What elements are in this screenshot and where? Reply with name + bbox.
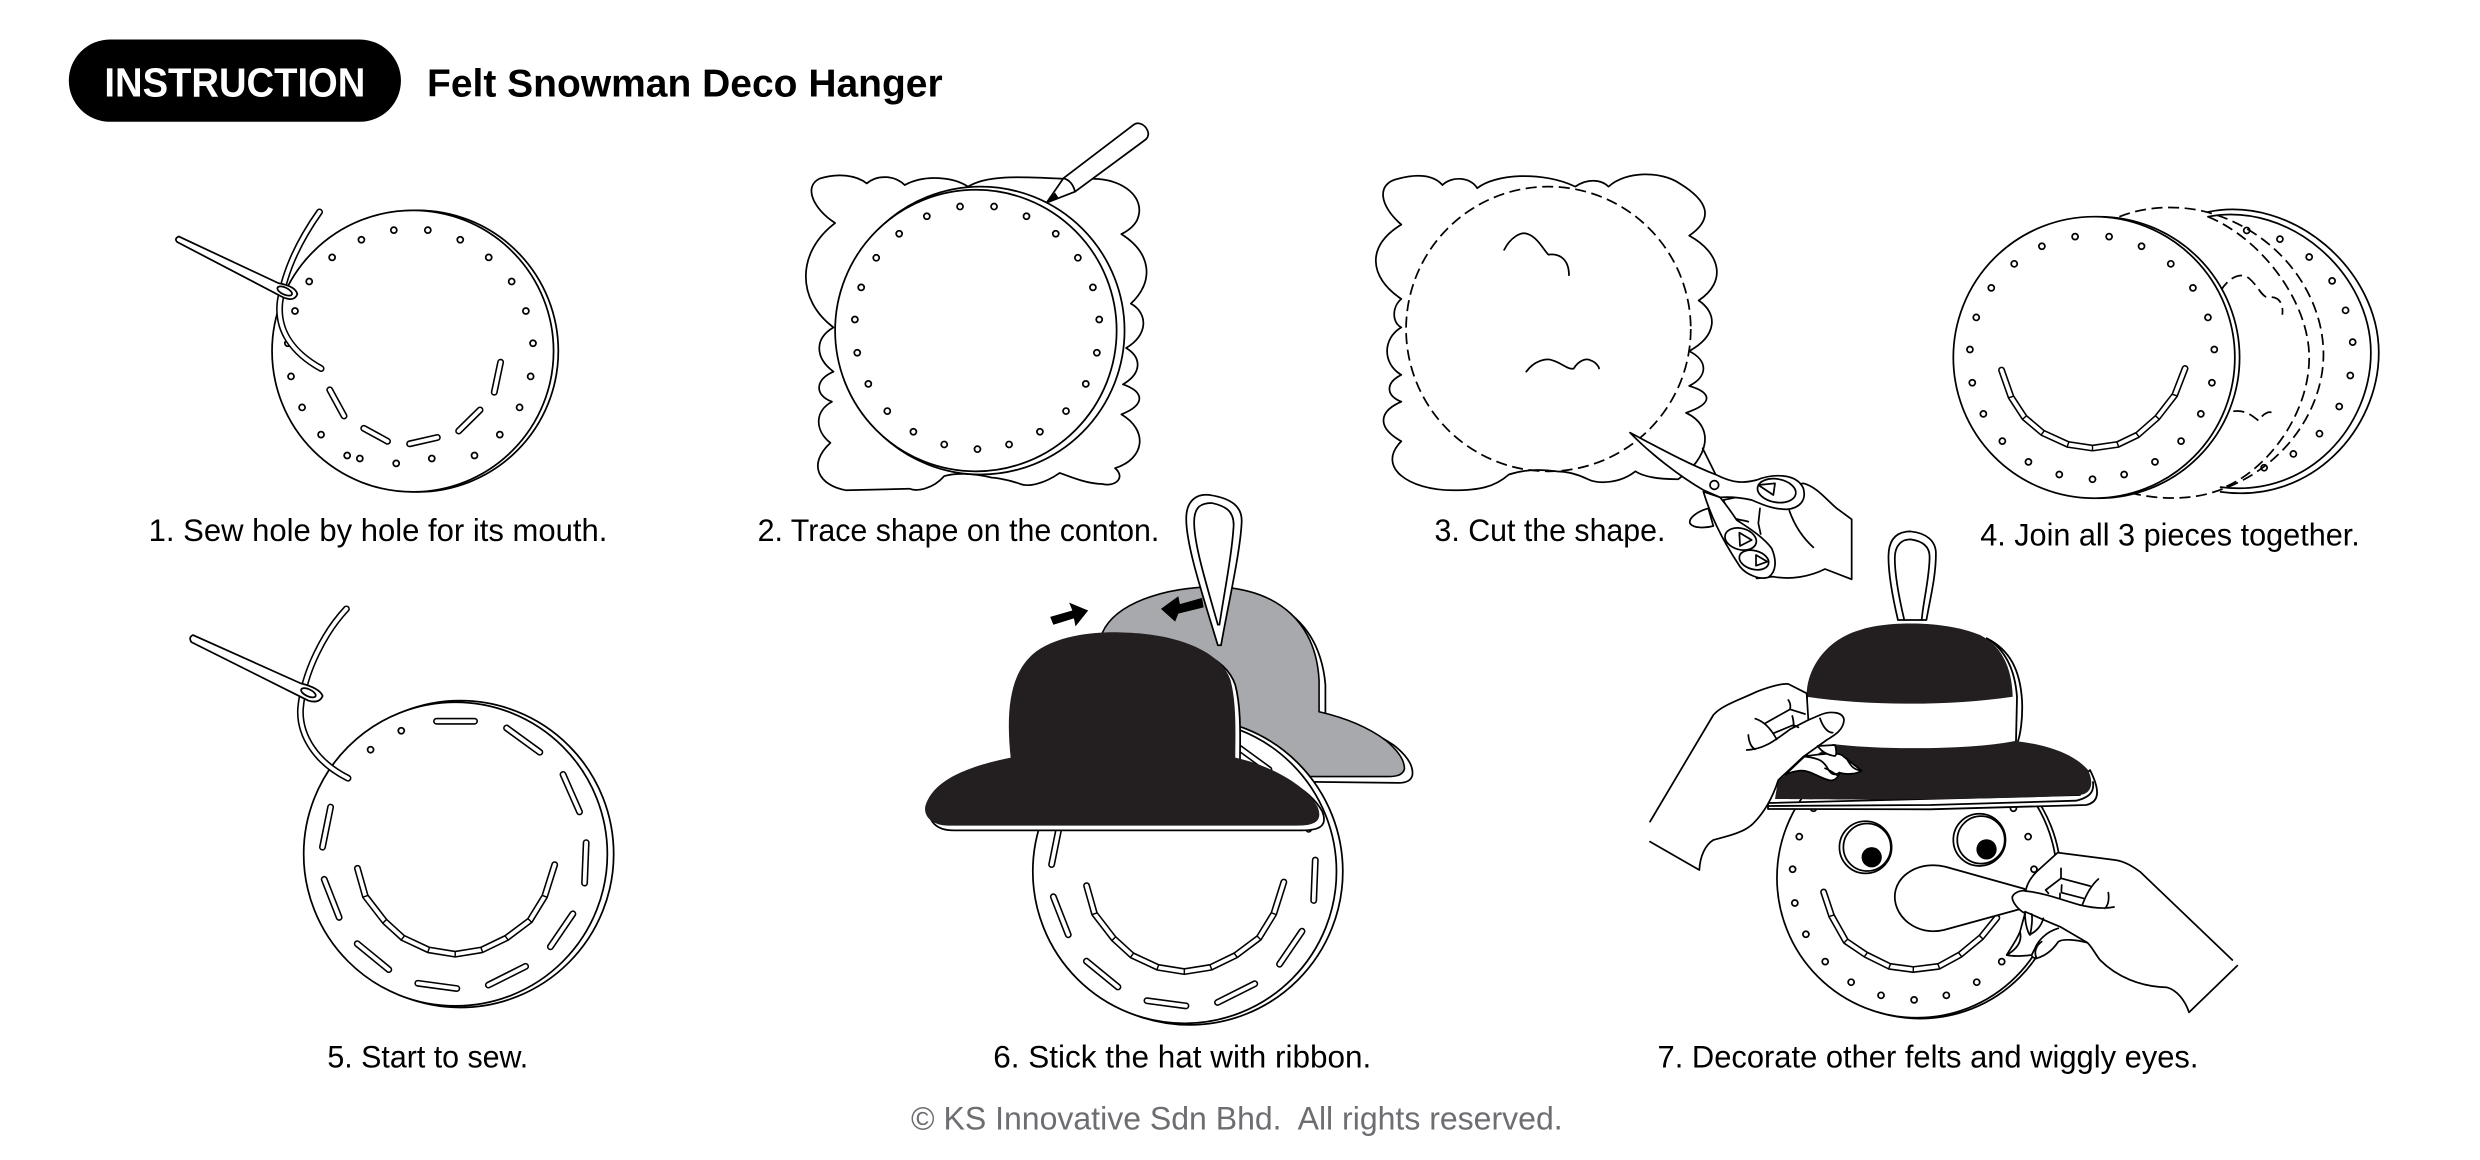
cotton cloud sheet bbox=[806, 175, 1147, 490]
cotton cloud sheet bbox=[1376, 174, 1717, 490]
step 7: decorate bbox=[1650, 531, 2237, 1019]
caption 1: 1. Sew hole by hole for its mouth. bbox=[149, 512, 607, 548]
pencil bbox=[1047, 123, 1148, 203]
thread bbox=[300, 609, 348, 778]
stitches bbox=[330, 362, 501, 444]
felt disc with stitches bbox=[1033, 718, 1343, 1025]
caption 4: 4. Join all 3 pieces together. bbox=[1980, 517, 2360, 553]
dashed middle piece bbox=[2119, 207, 2323, 498]
felt disc with holes bbox=[835, 187, 1125, 474]
ribbon loop bbox=[1888, 531, 1936, 620]
needle bbox=[176, 236, 297, 299]
felt disc bbox=[304, 701, 614, 1007]
stitches and mouth bbox=[322, 721, 586, 989]
step 6: stick the hat with ribbon bbox=[925, 495, 1413, 1025]
felt nose bbox=[1895, 865, 2024, 931]
chalk marks bbox=[1504, 233, 1599, 372]
grey hat back bbox=[1102, 587, 1413, 783]
instruction badge: INSTRUCTION bbox=[104, 59, 365, 105]
mouth stitching bbox=[2002, 369, 2185, 451]
needle bbox=[190, 635, 323, 702]
step 4: join 3 pieces bbox=[1953, 207, 2379, 498]
caption 5: 5. Start to sew. bbox=[327, 1039, 528, 1075]
instruction badge bbox=[69, 40, 401, 122]
thread bbox=[280, 212, 321, 369]
step 2: trace shape bbox=[806, 123, 1148, 490]
ribbon loop bbox=[1186, 495, 1242, 645]
wiggly eye left bbox=[1839, 821, 1892, 873]
dashed cut line bbox=[1406, 187, 1691, 471]
back disc with holes bbox=[2208, 209, 2379, 493]
wiggly eye right bbox=[1953, 814, 2006, 866]
direction arrows bbox=[1050, 596, 1204, 626]
black hat front bbox=[925, 632, 1324, 830]
caption 3: 3. Cut the shape. bbox=[1435, 512, 1665, 548]
step 1: sewing the mouth bbox=[176, 210, 558, 492]
copyright: © KS Innovative Sdn Bhd. All rights reserved. bbox=[911, 1100, 1563, 1136]
hand with scissors bbox=[1630, 433, 1852, 579]
hat with white band bbox=[1768, 623, 2097, 809]
felt disc with holes bbox=[272, 210, 558, 492]
title: Felt Snowman Deco Hanger bbox=[427, 62, 943, 105]
caption 7: 7. Decorate other felts and wiggly eyes. bbox=[1658, 1039, 2198, 1075]
step 3: cut the shape bbox=[1376, 174, 1852, 579]
right hand bbox=[2007, 853, 2237, 1012]
felt face disc with holes bbox=[1777, 737, 2061, 1019]
caption 2: 2. Trace shape on the conton. bbox=[758, 512, 1159, 548]
left hand bbox=[1650, 684, 1862, 870]
front disc with holes bbox=[1953, 217, 2240, 498]
step 5: start to sew bbox=[190, 609, 614, 1007]
caption 6: 6. Stick the hat with ribbon. bbox=[993, 1039, 1371, 1075]
mouth stitching bbox=[1824, 892, 1997, 973]
